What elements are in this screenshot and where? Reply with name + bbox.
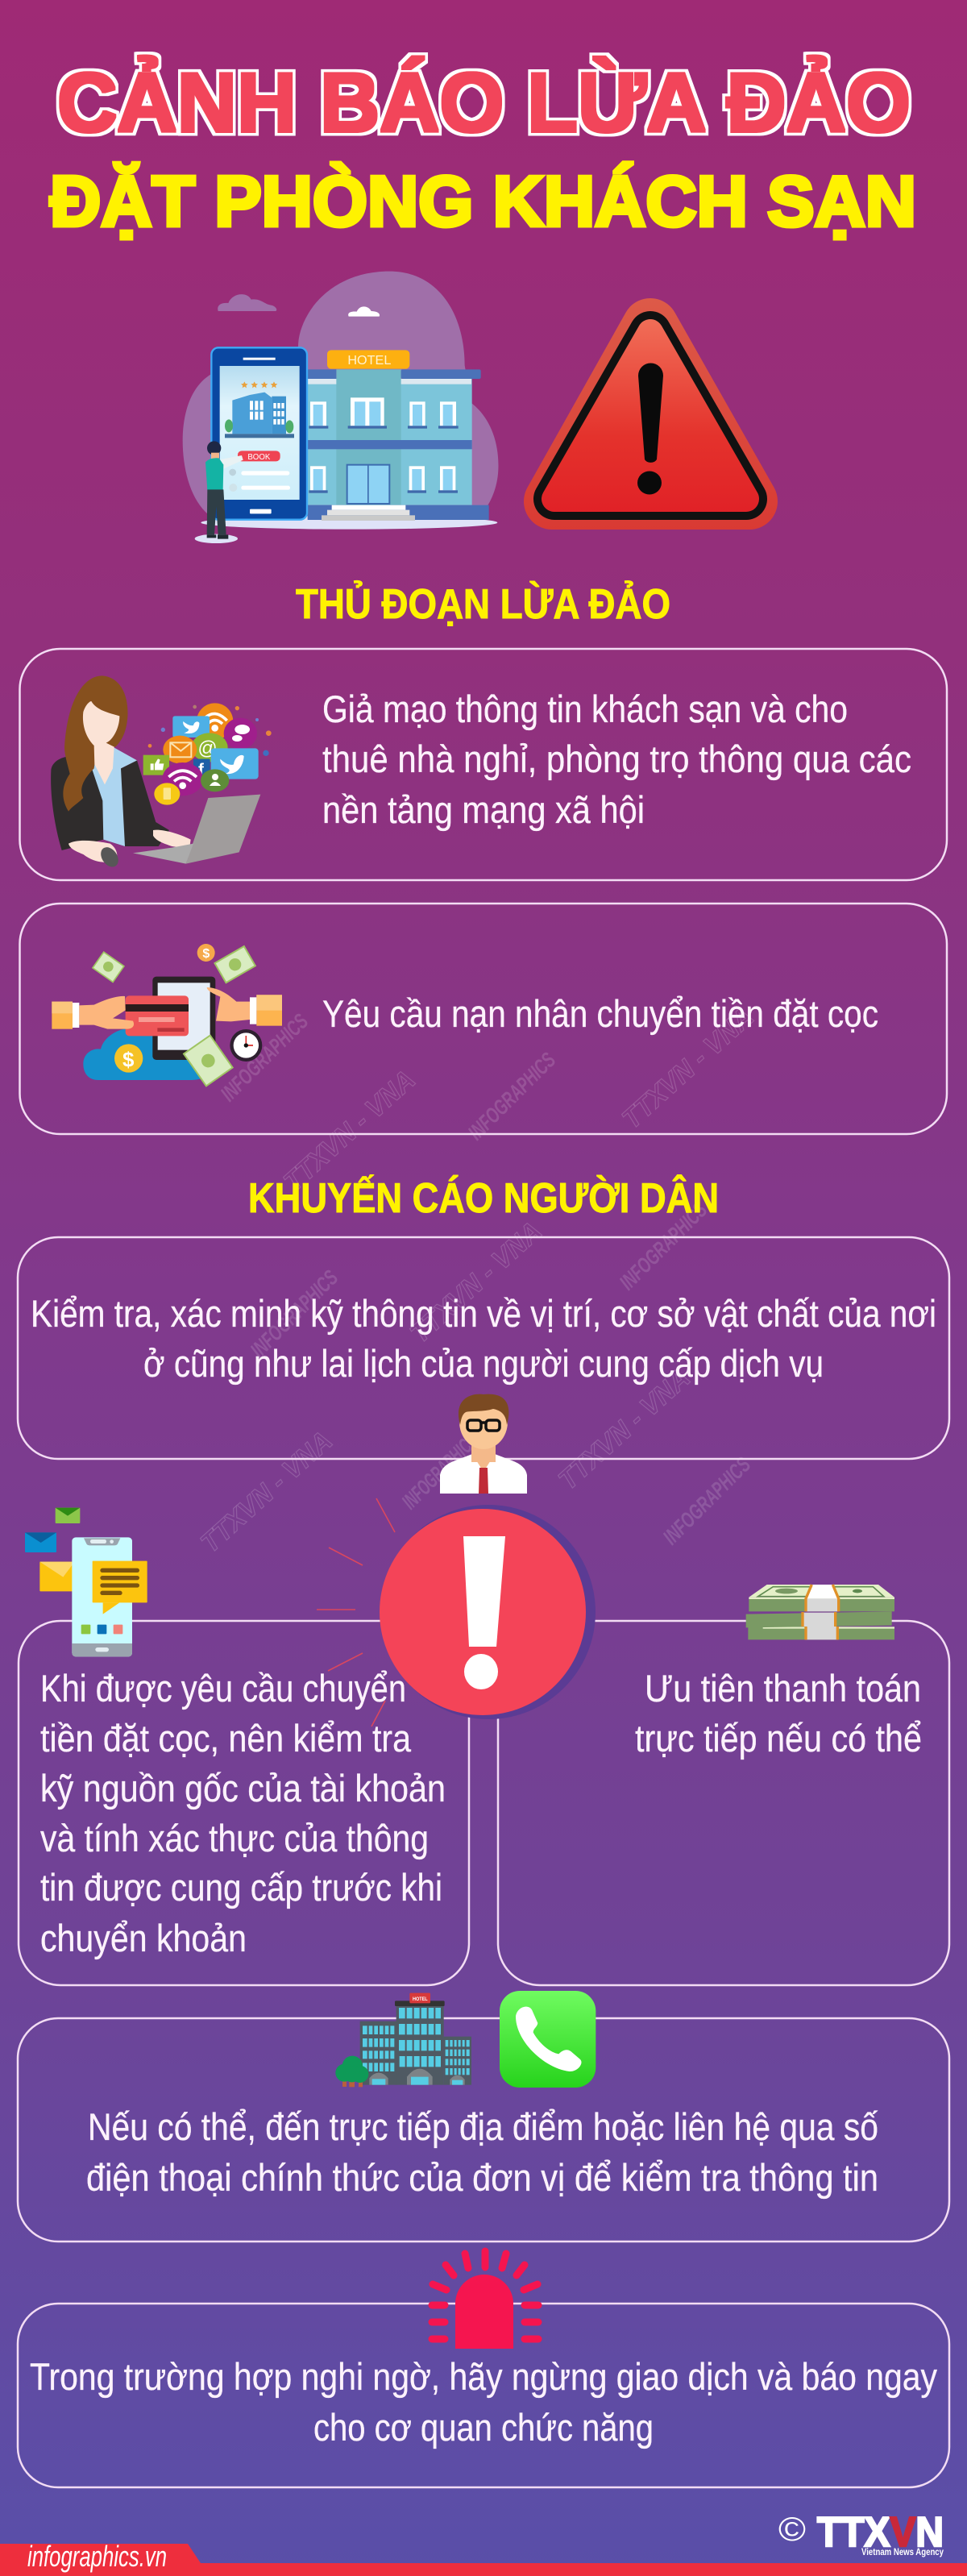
panel: visit or phone [18,2018,949,2242]
icon: phone app [500,1991,596,2088]
watermarks: TTXVN - VNA [553,1363,696,1496]
watermarks: TTXVN - VNA [278,1065,421,1198]
icon: hotel building [335,1993,471,2087]
watermarks: TTXVN - VNA [405,1216,548,1349]
text: direct payment [635,1667,922,1760]
title line 1: CẢNH BÁO LỪA ĐẢO [57,56,911,150]
icon: payment with card and cash [52,944,282,1086]
text: report suspicion [30,2355,937,2449]
icon: hotel building: HOTEL [413,1997,428,2002]
text: deposit verification: và tính xác thực của thông [40,1817,429,1859]
watermarks [195,1002,760,1559]
text: deposit verification: Khi được yêu cầu chuyển [40,1667,406,1710]
panel: report suspicion [18,2304,949,2487]
icon: woman with laptop and social media: f [198,760,204,779]
text: fake information: Giả mạo thông tin khách sạn và cho [322,688,848,730]
text: fake information [322,688,911,831]
hotel sign: HOTEL [347,354,391,368]
watermarks: INFOGRAPHICS [397,1428,483,1514]
watermarks: INFOGRAPHICS [246,1265,342,1362]
icon: alarm siren [432,2251,538,2349]
watermarks: TTXVN - VNA [616,1002,760,1135]
text: deposit verification: chuyển khoản [40,1917,247,1959]
icon: warning triangle [552,326,749,501]
ground [201,516,497,530]
illustration: hotel and phone booking [183,272,498,543]
phone [211,347,307,520]
icon: alert circle [380,1505,596,1719]
panel: direct payment [498,1621,949,1985]
footer band [0,2540,967,2576]
building [308,369,489,521]
text: verify information: ở cũng như lai lịch của người cung cấp dịch vụ [143,1342,824,1385]
text: deposit request: Yêu cầu nạn nhân chuyển tiền đặt cọc [322,992,878,1035]
watermarks: INFOGRAPHICS [658,1452,755,1549]
text: deposit verification: tin được cung cấp trước khi [40,1866,442,1909]
text: report suspicion: cho cơ quan chức năng [313,2406,654,2449]
logo: TTXVN: © [778,2510,806,2548]
icon: payment with card and cash: $ [202,947,210,961]
hotel sign [327,350,409,369]
clouds [218,294,276,311]
heading: recommendations: KHUYẾN CÁO NGƯỜI DÂN [248,1174,719,1222]
logo: TTXVN: TTXVN [817,2509,944,2556]
panel: deposit request [19,904,947,1134]
watermarks: TTXVN - VNA [195,1426,338,1559]
watermarks: INFOGRAPHICS [615,1198,712,1294]
phone: BOOK [247,453,271,462]
text: direct payment: trực tiếp nếu có thể [635,1717,922,1760]
text: deposit verification: tiền đặt cọc, nên kiểm tra [40,1717,412,1760]
icon: woman with laptop and social media: @ [197,737,218,759]
blob backdrop [183,272,498,524]
text: visit or phone: điện thoại chính thức của đơn vị để kiểm tra thông tin [86,2156,878,2199]
icon: man with glasses [440,1394,527,1494]
footer site name: infographics.vn [27,2540,167,2573]
watermarks: INFOGRAPHICS [216,1009,313,1106]
text: deposit verification: kỹ nguồn gốc của tài khoản [40,1767,446,1809]
panel: deposit verification [19,1621,469,1985]
watermarks: INFOGRAPHICS [463,1048,560,1145]
icon: smartphone with messages [25,1508,147,1656]
title line 2: ĐẶT PHÒNG KHÁCH SẠN [50,161,916,241]
text: fake information: thuê nhà nghỉ, phòng trọ thông qua các [322,737,911,780]
panel: verify information [18,1237,949,1459]
person [205,441,243,539]
panel: fake information [19,649,947,880]
decorative rays around alert [317,1498,395,1726]
title [50,56,916,241]
heading: scam tricks: THỦ ĐOẠN LỪA ĐẢO [296,580,670,628]
text: deposit verification [40,1667,446,1959]
text: verify information [31,1292,936,1385]
icon: stack of cash [746,1585,894,1639]
text: direct payment: Ưu tiên thanh toán [645,1667,921,1710]
text: fake information: nền tảng mạng xã hội [322,788,645,831]
icon: payment with card and cash: $ [122,1047,135,1071]
icon: woman with laptop and social media [51,675,272,870]
logo: TTXVN: Vietnam News Agency [861,2548,944,2557]
text: visit or phone [86,2105,878,2199]
